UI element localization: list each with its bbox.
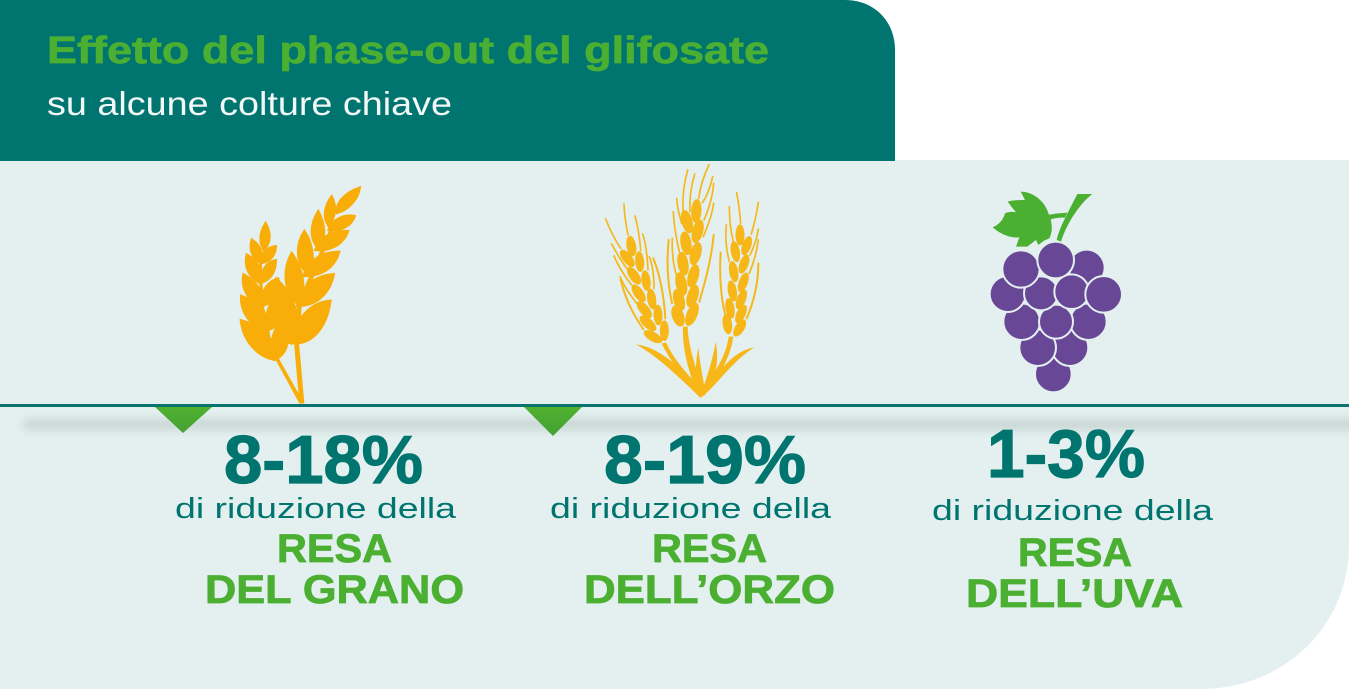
text block: barley: di riduzione della [550,493,832,525]
subtitle: su alcune colture chiave [47,85,452,122]
panel: title header [0,0,895,161]
icon: wheat [241,187,360,403]
panel: pale background [0,160,1349,689]
title: Effetto del phase-out del glifosate [47,30,769,72]
number: grapes: 1-3% [987,416,1145,492]
text block: grapes: RESA [1018,531,1132,575]
pointer: barley [524,407,582,436]
text block: wheat: DEL GRANO [205,568,464,612]
number: wheat: 8-18% [224,422,423,498]
divider line [0,404,1349,407]
number: barley: 8-19% [604,422,806,498]
icon: grapes [990,192,1122,392]
text block: grapes: di riduzione della [932,495,1214,527]
text block: wheat: di riduzione della [175,493,457,525]
pointer: wheat [155,407,212,433]
text block: grapes: DELL’UVA [966,572,1183,616]
text block: barley: RESA [652,527,767,571]
text block: wheat [175,422,464,612]
icon: barley [606,165,758,398]
text block: barley: DELL’ORZO [584,568,835,612]
shadow under the divider [24,420,1349,429]
text block: grapes [932,416,1214,616]
text block: wheat: RESA [277,527,392,571]
text block: barley [550,422,835,612]
